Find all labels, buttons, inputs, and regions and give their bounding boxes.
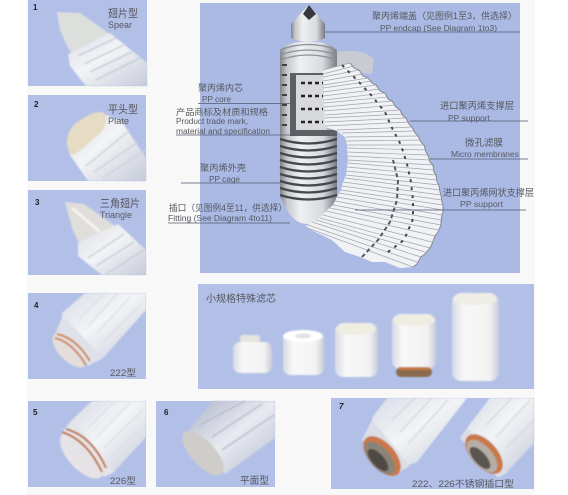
label: spear: Spear [108,20,132,30]
callout: PP support lower [355,187,534,210]
panel: small special filters [198,284,534,389]
callout: fitting [168,202,290,223]
number 2: 2 [34,100,39,109]
callout: PP core [198,82,290,104]
label: 222 type: 222型 [110,368,136,378]
callout: PP support upper: PP support [448,114,491,123]
callout: product trade mark: Product trade mark, [176,117,248,126]
number 5: 5 [33,408,38,417]
icon: cartridge body [280,5,374,224]
callout: PP endcap: 聚丙烯端盖（见图例1至3，供选择） [372,10,517,21]
callout: PP cage: PP cage [209,175,241,184]
label: stainless fitting type: 222、226不锈钢插口型 [412,478,514,489]
callout: micro membranes: Micro membranes [451,150,519,159]
icon: small filter 1 [233,335,272,373]
callout: PP core: 聚丙烯内芯 [198,82,243,93]
icon: stainless cartridge right [458,398,534,481]
number 6: 6 [164,408,169,417]
panel 7: stainless fitting [331,398,534,489]
callout: fitting: 插口（见图例4至11，供选择） [169,202,287,213]
label: plate: 平头型 [108,102,138,116]
callout: PP endcap: PP endcap (See Diagram 1to3) [380,24,497,33]
icon: plate cartridge [67,112,146,181]
callout: product trade mark [176,107,290,136]
icon: small filter 3 [335,323,378,377]
icon: 222 cartridge [47,293,146,373]
icon: 226 cartridge [52,401,146,486]
number 3: 3 [35,198,40,207]
label: triangle [100,196,140,220]
panel 4: 222 [28,293,146,379]
callout: micro membranes [430,137,528,159]
label: spear: 翅片型 [108,6,138,20]
panel 6: flat [156,401,275,487]
icon: pleated filter fan [305,63,443,268]
icon: small filter 2 [283,330,324,375]
icon: flat cartridge [175,401,275,482]
label: plate [108,102,138,126]
label: triangle: 三角翅片 [100,196,140,210]
label: flat type: 平面型 [240,474,269,487]
callout: fitting: Fitting (See Diagram 4to11) [168,214,272,223]
label: plate: Plate [108,116,129,126]
callout: PP cage [181,162,280,184]
panel 2: plate [28,95,146,181]
number 7: 7 [339,402,344,411]
panel: main exploded diagram [168,3,534,273]
icon: spear cartridge [57,12,147,86]
number 4: 4 [34,301,39,310]
icon: stainless cartridge left [356,398,467,483]
label: triangle: Triangle [100,210,132,220]
panel 5: 226 [28,401,146,487]
icon: small filter 4 [392,314,436,377]
callout: micro membranes: 微孔滤膜 [465,137,503,149]
callout: PP core: PP core [202,95,232,104]
callout: PP support lower: PP support [460,200,504,209]
callout: PP endcap [325,10,520,33]
label: 226 type: 226型 [110,476,136,486]
callout: PP cage: 聚丙烯外壳 [200,162,246,173]
label: spear [108,6,138,30]
callout: PP support lower: 进口聚丙烯网状支撑层 [443,187,534,199]
number 1: 1 [33,3,38,12]
callout: PP support upper: 进口聚丙烯支撑层 [440,100,514,112]
icon: small filter 5 [452,293,499,381]
heading: small special filters: 小规格特殊滤芯 [206,292,276,305]
panel 3: triangle [28,190,146,275]
callout: product trade mark: material and specification [176,127,270,136]
panel 1: spear [28,0,147,86]
callout: product trade mark: 产品商标及材质和规格 [176,107,269,117]
icon: triangle cartridge [65,202,146,275]
callout: PP support upper [410,100,528,123]
